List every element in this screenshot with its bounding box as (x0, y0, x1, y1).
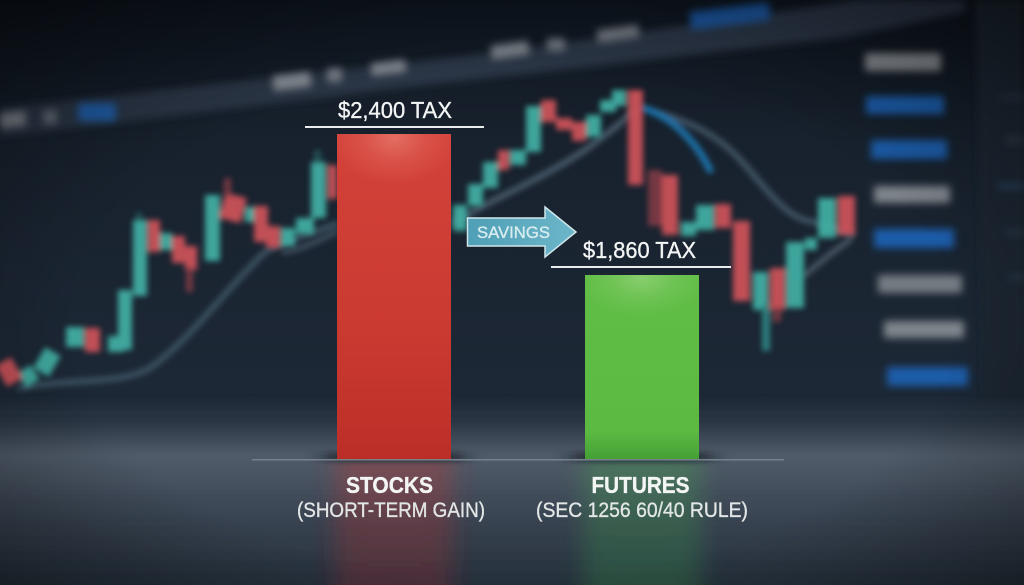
moving average lines (20, 108, 852, 388)
stocks label rule (305, 126, 484, 128)
stocks category label: (SHORT-TERM GAIN) (297, 499, 485, 522)
stocks category label (297, 472, 485, 522)
toolbar blurred labels (0, 2, 771, 129)
teal candles (17, 90, 836, 388)
green bar reflection (583, 461, 701, 585)
stocks tax value label: $2,400 TAX (338, 97, 452, 123)
teal wicks (136, 150, 770, 351)
red candles (0, 90, 855, 387)
savings arrow (468, 207, 576, 257)
top toolbar band of blurred chart (0, 0, 1024, 420)
red bar reflection (335, 461, 453, 585)
bar: futures (585, 275, 699, 459)
futures tax value label: $1,860 TAX (583, 237, 696, 263)
futures category label (536, 472, 748, 522)
candlesticks (0, 90, 855, 388)
muted red wicks (186, 170, 781, 322)
right price column blurred values (865, 53, 1024, 418)
savings arrow: SAVINGS (477, 224, 550, 242)
stocks category label: STOCKS (346, 472, 433, 498)
floor (0, 400, 1024, 585)
futures category label: (SEC 1256 60/40 RULE) (536, 499, 748, 522)
bar contact shadows (325, 453, 711, 461)
baseline (252, 459, 784, 460)
bar: stocks (337, 134, 451, 459)
futures label rule (551, 266, 731, 268)
futures category label: FUTURES (592, 472, 690, 498)
